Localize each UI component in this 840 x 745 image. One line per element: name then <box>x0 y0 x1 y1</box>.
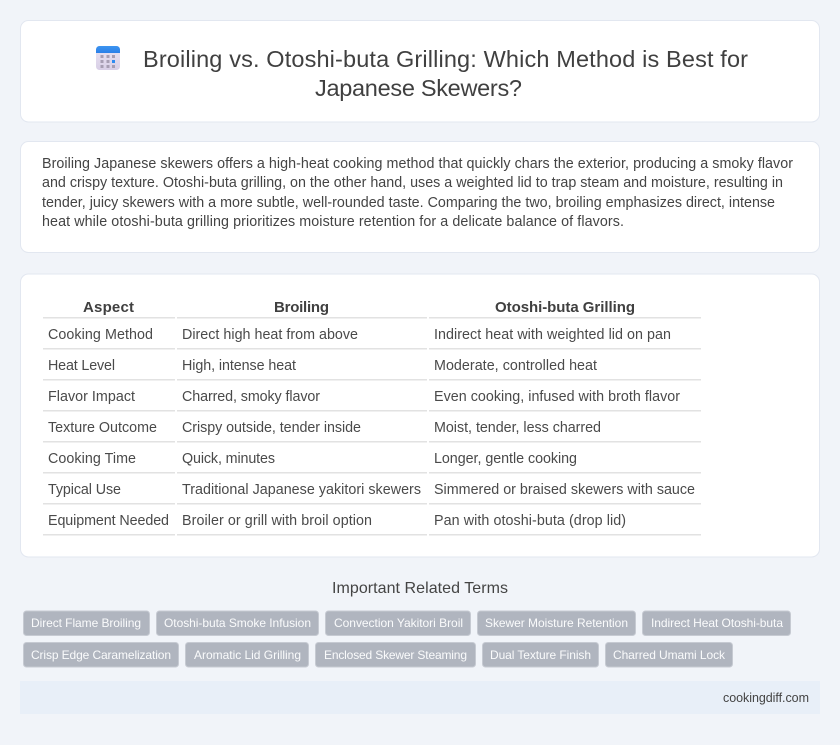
related term tags <box>24 611 790 667</box>
text block: introduction paragraph: heat while otoshi-buta grilling prioritizes moisture retention for a delicate balance of flavors. <box>42 214 624 230</box>
tag: dual texture finish: Dual Texture Finish <box>490 648 591 662</box>
table header row: Otoshi-buta Grilling <box>495 299 635 316</box>
row: typical use: Typical Use <box>48 482 121 498</box>
row: texture outcome <box>43 420 701 442</box>
text block: introduction paragraph <box>42 156 793 230</box>
text block: introduction paragraph: Broiling Japanese skewers offers a high-heat cooking method that quickly chars the exterior, producing a smoky flavor <box>42 156 793 172</box>
table header row: Broiling <box>274 299 329 316</box>
panel: introduction <box>20 142 820 252</box>
title <box>143 46 748 101</box>
icon: calendar <box>96 46 120 70</box>
footer <box>20 681 820 714</box>
tag: dual texture finish <box>482 642 598 667</box>
tag: aromatic lid grilling <box>186 642 308 667</box>
row: flavor impact: Flavor Impact <box>48 389 135 405</box>
tag: indirect heat otoshi-buta <box>642 611 790 636</box>
row: cooking method: Direct high heat from above <box>182 327 358 343</box>
row: heat level: High, intense heat <box>182 358 296 374</box>
tag: skewer moisture retention <box>478 611 636 636</box>
tag: otoshi-buta smoke infusion: Otoshi-buta Smoke Infusion <box>164 616 311 630</box>
tag: direct flame broiling: Direct Flame Broiling <box>31 616 141 630</box>
row: cooking time <box>43 451 701 474</box>
row: equipment needed: Equipment Needed <box>48 513 169 529</box>
row: cooking time: Longer, gentle cooking <box>434 451 577 467</box>
panel: comparison table <box>20 274 820 557</box>
row: cooking time: Cooking Time <box>48 451 136 467</box>
row: typical use: Traditional Japanese yakitori skewers <box>182 482 421 498</box>
title: Broiling vs. Otoshi-buta Grilling: Which Method is Best for <box>143 46 748 72</box>
text block: introduction paragraph: tender, juicy skewers with a more subtle, well-rounded taste. Comparing the two, broiling emphasizes direct, intense <box>42 195 775 211</box>
row: equipment needed <box>43 513 701 536</box>
tag: crisp edge caramelization <box>24 642 178 667</box>
row: typical use <box>43 482 701 504</box>
row: heat level: Moderate, controlled heat <box>434 358 597 374</box>
footer: cookingdiff.com <box>723 691 809 705</box>
row: heat level <box>43 358 701 380</box>
row: heat level: Heat Level <box>48 358 115 374</box>
row: typical use: Simmered or braised skewers with sauce <box>434 482 695 498</box>
tag: charred umami lock <box>606 642 732 667</box>
tag: otoshi-buta smoke infusion <box>156 611 318 636</box>
row: texture outcome: Moist, tender, less charred <box>434 420 601 436</box>
row: cooking time: Quick, minutes <box>182 451 275 467</box>
row: cooking method <box>43 327 701 350</box>
table header row <box>43 299 701 318</box>
tag: skewer moisture retention: Skewer Moisture Retention <box>485 616 628 630</box>
row: equipment needed: Pan with otoshi-buta (drop lid) <box>434 513 626 529</box>
row: texture outcome: Texture Outcome <box>48 420 157 436</box>
tag: charred umami lock: Charred Umami Lock <box>613 648 726 662</box>
table header row: Aspect <box>83 299 134 316</box>
tag: enclosed skewer steaming: Enclosed Skewer Steaming <box>324 648 467 662</box>
title: Japanese Skewers? <box>315 75 522 101</box>
row: flavor impact: Even cooking, infused with broth flavor <box>434 389 680 405</box>
tag: convection yakitori broil <box>326 611 470 636</box>
text block: introduction paragraph: and crispy texture. Otoshi-buta grilling, on the other hand, uses a weighted lid to trap steam and moisture, resulting in <box>42 175 783 191</box>
row: equipment needed: Broiler or grill with broil option <box>182 513 372 529</box>
tag: aromatic lid grilling: Aromatic Lid Grilling <box>194 648 301 662</box>
row: flavor impact <box>43 389 701 412</box>
panel: title header <box>20 20 820 122</box>
row: flavor impact: Charred, smoky flavor <box>182 389 320 405</box>
row: texture outcome: Crispy outside, tender inside <box>182 420 361 436</box>
tag: indirect heat otoshi-buta: Indirect Heat Otoshi-buta <box>651 616 783 630</box>
tag: convection yakitori broil: Convection Yakitori Broil <box>334 616 463 630</box>
row: cooking method: Cooking Method <box>48 327 153 343</box>
tag: direct flame broiling <box>24 611 150 636</box>
row: cooking method: Indirect heat with weighted lid on pan <box>434 327 671 343</box>
tag: enclosed skewer steaming <box>316 642 476 667</box>
tag: crisp edge caramelization: Crisp Edge Caramelization <box>31 648 171 662</box>
heading: important related terms: Important Related Terms <box>332 580 508 597</box>
